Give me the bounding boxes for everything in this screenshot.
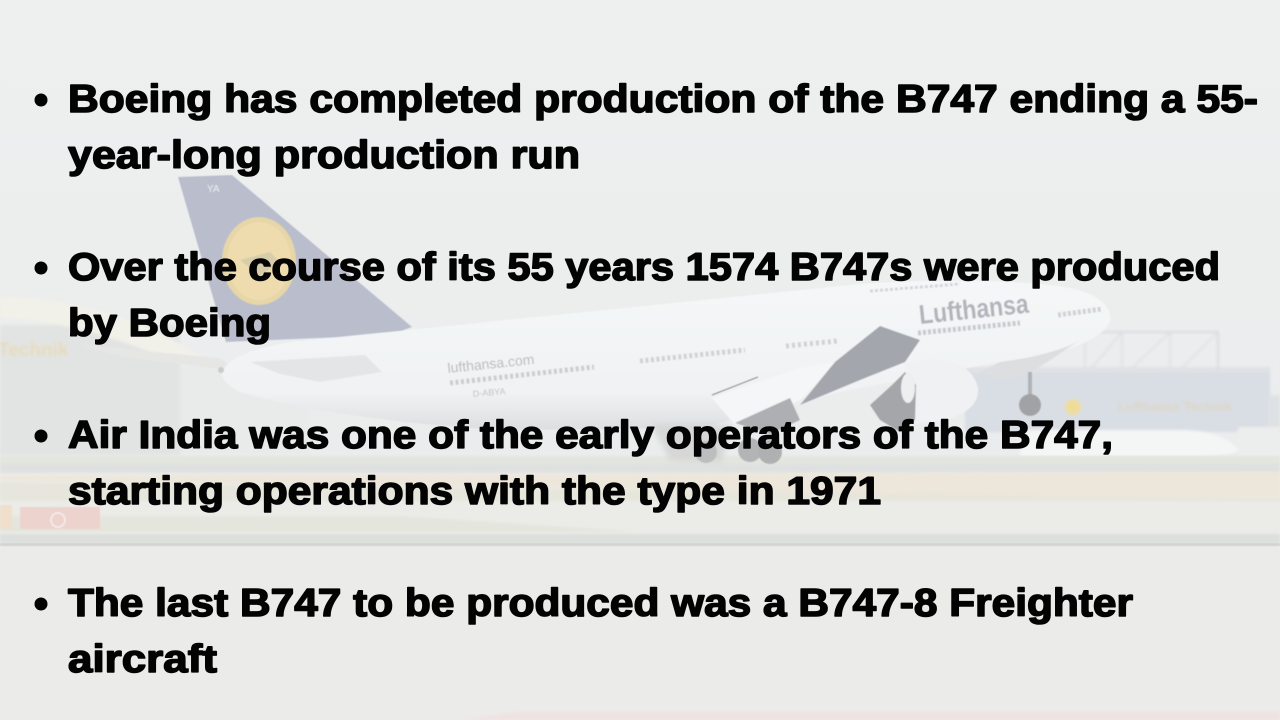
bullet: Air India: starting operations with the type in 1971 xyxy=(68,470,881,513)
bullet: total produced xyxy=(34,246,1220,345)
distant aircraft xyxy=(1020,427,1280,459)
hangar at right xyxy=(965,332,1280,435)
bullet: last aircraft xyxy=(34,582,1133,681)
titles and windows on fuselage: lufthansa.com xyxy=(447,351,535,376)
bullet: production end: year-long production run xyxy=(68,134,580,177)
bullet: Air India xyxy=(34,414,1113,513)
background photo: aircraft on runway: YA xyxy=(207,184,220,195)
bullet: production end xyxy=(34,78,1258,177)
background photo: aircraft on runway: Lufthansa xyxy=(917,289,1031,330)
hangar at right: Lufthansa Technik xyxy=(1118,399,1233,414)
bullet: total produced: Over the course of its 55 years 1574 B747s were produced xyxy=(68,246,1220,289)
tail fin xyxy=(178,175,412,342)
hangar at left: Technik xyxy=(0,340,69,361)
bullet: total produced: by Boeing xyxy=(68,302,271,345)
bullet: production end: Boeing has completed production of the B747 ending a 55- xyxy=(68,78,1258,121)
wing xyxy=(800,326,920,405)
landing gear xyxy=(1028,372,1032,398)
ground bands xyxy=(0,456,1280,720)
bullet: last aircraft: The last B747 to be produced was a B747-8 Freighter xyxy=(68,582,1133,625)
bullet: last aircraft: aircraft xyxy=(68,638,217,681)
background photo: aircraft on runway: D-ABYA xyxy=(472,386,506,399)
hangar at left xyxy=(0,296,310,455)
fuselage xyxy=(222,281,1111,430)
engine xyxy=(905,359,978,424)
horizontal stabiliser xyxy=(80,345,240,372)
bullet: Air India: Air India was one of the early operators of the B747, xyxy=(68,414,1113,457)
